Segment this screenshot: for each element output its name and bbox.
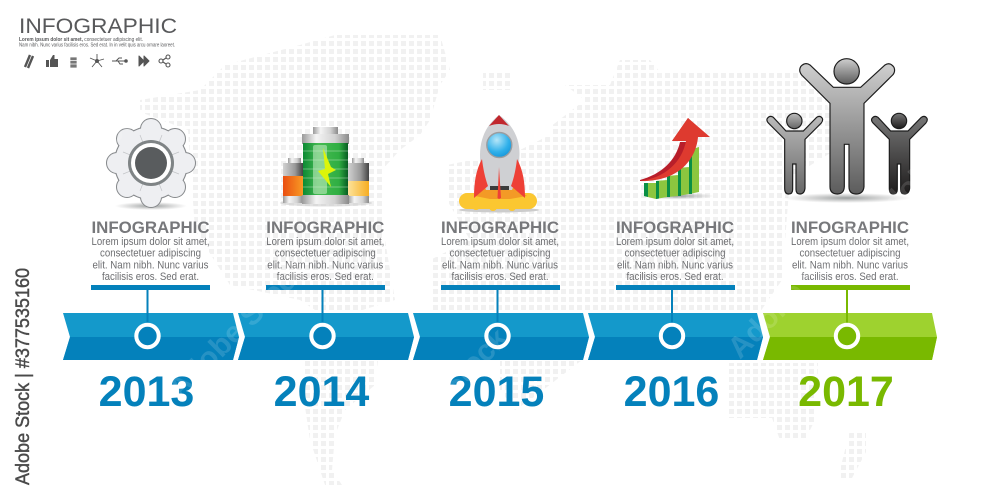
text block: 2013: INFOGRAPHIC [92, 218, 210, 237]
year: 2016: 2016 [624, 368, 719, 416]
icon: thumbs up [46, 55, 58, 67]
icon: gear [107, 119, 195, 210]
text block: 2013: Lorem ipsum dolor sit amet, [92, 236, 210, 248]
watermark overlay: Adobe Stock [722, 212, 875, 365]
subtitle text: Nam nibh. Nunc varius facilisis eros. Sed erat. In in velit quis arcu ornare laoreet. [19, 42, 175, 48]
text block: 2013: facilisis eros. Sed erat. [102, 271, 199, 283]
nose cone [489, 115, 509, 126]
text block: 2014: facilisis eros. Sed erat. [277, 271, 374, 283]
icon: share [159, 55, 170, 67]
icon: three people [767, 59, 927, 203]
nozzle [490, 186, 509, 190]
arrow [640, 118, 710, 181]
text block: 2017: facilisis eros. Sed erat. [802, 271, 898, 283]
text block: 2013 [92, 218, 210, 283]
text block: 2015: elit. Nam nibh. Nunc varius [442, 259, 558, 271]
icon row [25, 54, 170, 68]
year: 2013: 2013 [99, 368, 194, 416]
timeline segment: 2013 [63, 285, 239, 360]
side label: stock id: Adobe Stock | #377535160 [13, 268, 34, 485]
year: 2015: 2015 [449, 368, 544, 416]
adult figure [800, 59, 895, 194]
text block: 2013: consectetuer adipiscing [100, 248, 201, 260]
icon: tools [25, 55, 33, 68]
text block: 2016: facilisis eros. Sed erat. [626, 271, 724, 283]
timeline segment: 2014 [238, 285, 414, 360]
text block: 2016: INFOGRAPHIC [616, 218, 734, 237]
watermark overlay: Adobe Stock [162, 252, 315, 405]
timeline segment: 2015 [413, 285, 589, 360]
icon: batteries [280, 127, 372, 206]
fins [474, 159, 525, 199]
flames [459, 188, 537, 211]
text block: 2014: elit. Nam nibh. Nunc varius [267, 259, 384, 271]
text block: 2014 [266, 218, 384, 283]
text block: 2014: Lorem ipsum dolor sit amet, [266, 236, 384, 248]
icon: rocket [459, 115, 539, 212]
timeline segment: 2017 [763, 285, 937, 360]
text block: 2017: consectetuer adipiscing [800, 248, 900, 260]
watermark overlay: Adobe Stock [362, 322, 515, 475]
text block: 2014: consectetuer adipiscing [275, 248, 376, 260]
rocket body [480, 115, 520, 190]
text block: 2015: INFOGRAPHIC [441, 218, 559, 237]
text block: 2015: Lorem ipsum dolor sit amet, [441, 236, 559, 248]
subtitle text: Lorem ipsum dolor sit amet, consectetuer adipiscing elit. [19, 37, 143, 43]
text block: 2015: consectetuer adipiscing [450, 248, 550, 260]
watermark overlay: Adobe Stock [2, 92, 155, 245]
text block: 2016: Lorem ipsum dolor sit amet, [616, 236, 734, 248]
small left battery [283, 158, 303, 203]
text block: 2014: INFOGRAPHIC [266, 218, 384, 237]
child figure left [767, 113, 823, 194]
text block: 2017: elit. Nam nibh. Nunc varius [792, 259, 908, 271]
bars [644, 147, 699, 199]
icon: network [90, 54, 104, 67]
text block: 2015 [441, 218, 559, 283]
child figure right [872, 113, 927, 194]
porthole [487, 132, 512, 158]
text block: 2017 [791, 218, 909, 283]
year: 2017: 2017 [798, 368, 894, 416]
icon: usb [112, 58, 128, 64]
text block: 2016: consectetuer adipiscing [624, 248, 726, 260]
text block: 2013: elit. Nam nibh. Nunc varius [92, 259, 209, 271]
watermark overlay: Adobe Stock [542, 32, 695, 185]
background: dotted world map [140, 35, 866, 485]
title: INFOGRAPHIC [19, 15, 177, 38]
large green battery [302, 127, 349, 204]
icon: database [70, 57, 77, 68]
text block: 2016 [616, 218, 734, 283]
text block: 2015: facilisis eros. Sed erat. [452, 271, 548, 283]
text block: 2017: INFOGRAPHIC [791, 218, 909, 237]
subtitle text [19, 37, 175, 48]
text block: 2016: elit. Nam nibh. Nunc varius [617, 259, 733, 271]
icon: fast forward [139, 56, 149, 66]
year: 2014: 2014 [274, 368, 369, 416]
small right battery [348, 158, 369, 203]
icon: growth chart with arrow [640, 118, 714, 200]
text block: 2017: Lorem ipsum dolor sit amet, [791, 236, 909, 248]
timeline segment: 2016 [588, 285, 763, 360]
header block [19, 15, 177, 68]
